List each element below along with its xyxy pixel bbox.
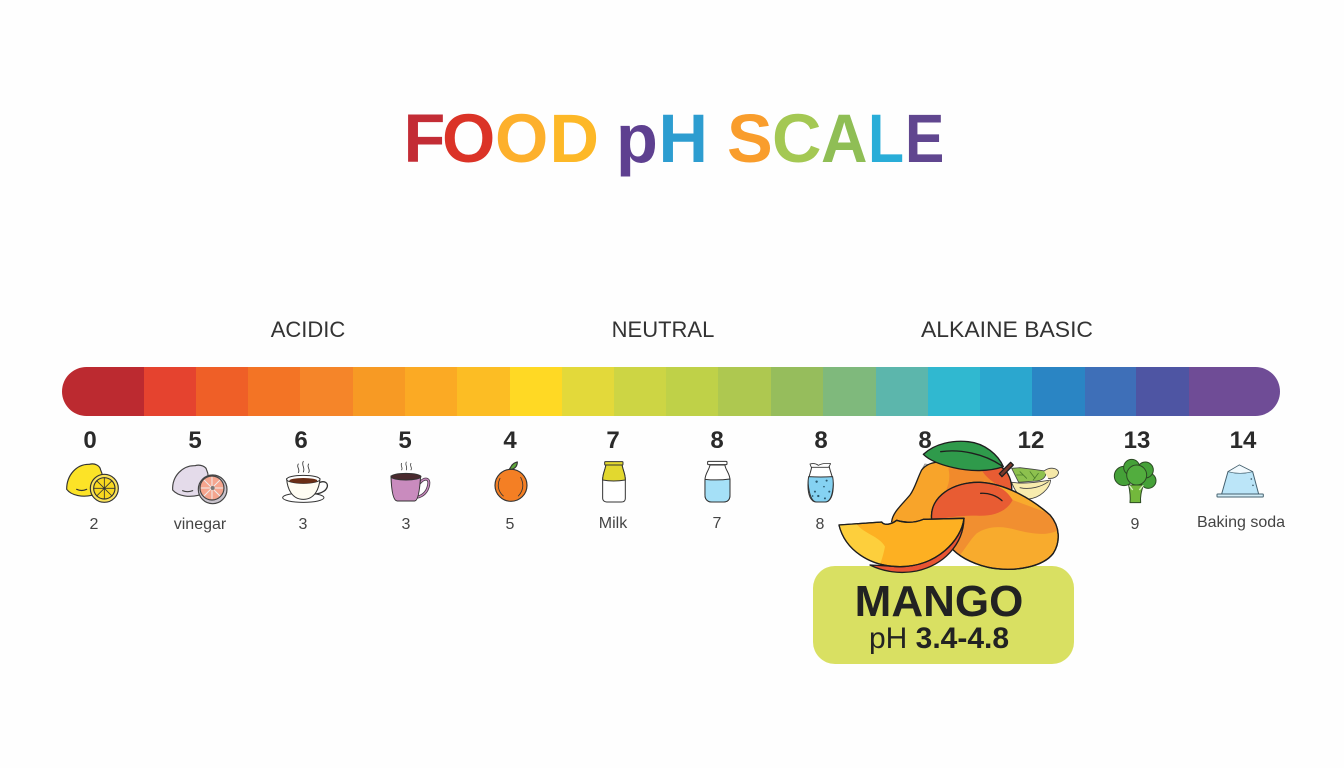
title: O: [495, 100, 548, 177]
food labels: 9: [1131, 516, 1140, 533]
icon: jar with seeds: [808, 463, 833, 502]
title: E: [905, 100, 944, 177]
food labels: vinegar: [174, 516, 227, 533]
title: A: [821, 101, 868, 177]
title: H: [658, 100, 708, 177]
title: C: [772, 100, 821, 177]
food labels: 3: [299, 516, 308, 533]
mango slice: [839, 518, 964, 572]
pH numbers: 8: [918, 427, 932, 454]
stem: [999, 462, 1013, 477]
pH numbers: 8: [814, 427, 828, 454]
title: p: [616, 100, 658, 177]
icon: bowl with greens: [1012, 468, 1059, 499]
food labels: 5: [506, 516, 515, 533]
icon: broccoli: [1114, 459, 1156, 503]
pH numbers: 14: [1230, 427, 1257, 454]
icon: partly hidden gray item behind mango: [921, 464, 930, 478]
icon: coffee cup: [283, 461, 327, 502]
icon: lemon: [67, 464, 118, 502]
pH numbers: 0: [83, 427, 97, 454]
category labels: NEUTRAL: [612, 317, 714, 342]
food labels: 7: [713, 515, 722, 532]
icon: grapefruit: [173, 465, 227, 504]
icon: orange: [495, 462, 527, 501]
pH numbers: 5: [188, 427, 202, 454]
pH numbers: 8: [710, 427, 724, 454]
back mango: [891, 462, 1012, 522]
category labels: ALKAINE BASIC: [921, 317, 1093, 342]
food labels: Milk: [599, 515, 628, 532]
category labels: [271, 317, 1093, 342]
title: F: [404, 100, 445, 177]
title: D: [550, 100, 599, 177]
food labels: Baking soda: [1197, 514, 1285, 531]
pH numbers: 5: [398, 427, 412, 454]
callout panel: mango: [813, 566, 1074, 664]
front mango: [931, 482, 1059, 569]
category labels: ACIDIC: [271, 317, 345, 342]
icon: water bottle: [705, 461, 730, 502]
pH colour bar: [62, 367, 1280, 416]
pH numbers: [83, 427, 1257, 454]
title: L: [868, 100, 904, 177]
icon: purple cup: [391, 462, 429, 501]
food labels: 3: [402, 516, 411, 533]
mango name: MANGO: [855, 577, 1023, 626]
icon: baking soda mound: [1217, 465, 1263, 497]
title: S: [727, 100, 773, 177]
pH numbers: 12: [1018, 427, 1044, 454]
leaf: [923, 441, 1003, 471]
mango pH range: pH 3.4-4.8: [869, 622, 1009, 655]
food labels: 2: [90, 516, 99, 533]
icon: mango illustration: [839, 441, 1059, 572]
pH numbers: 6: [294, 427, 308, 454]
food labels: 8: [816, 516, 825, 533]
icon: milk bottle: [603, 462, 625, 502]
pH numbers: 7: [606, 427, 620, 454]
pH numbers: 4: [503, 427, 517, 454]
food labels: [90, 514, 1285, 533]
title: [404, 100, 944, 177]
pH numbers: 13: [1124, 427, 1150, 454]
title: O: [442, 100, 495, 177]
